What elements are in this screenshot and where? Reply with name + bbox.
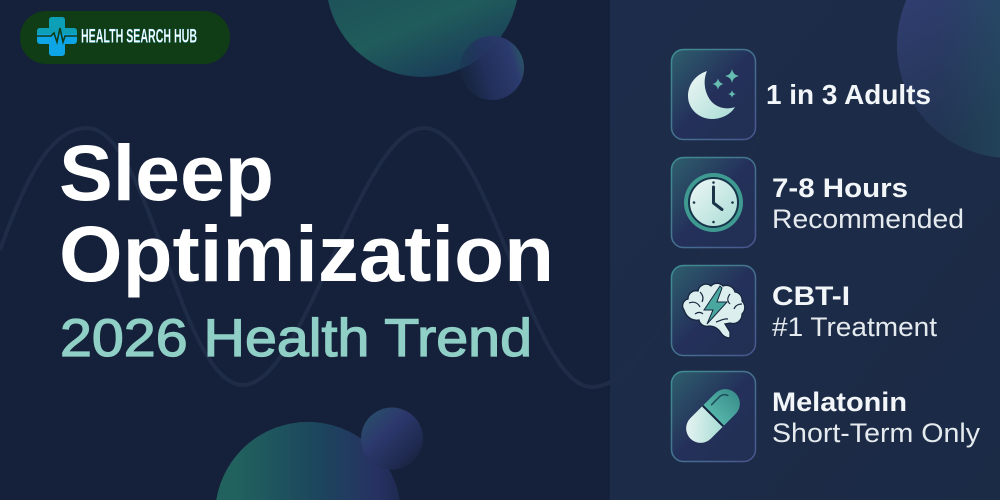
sine wave: [0, 128, 760, 387]
logo badge: [20, 11, 230, 64]
title: Optimization: [59, 209, 554, 298]
corner orb: [897, 0, 1000, 158]
icon tile: brain: [672, 266, 756, 356]
stat: adults: [672, 50, 931, 140]
label: 7-8 Hours: [772, 173, 908, 203]
right panel: [610, 0, 1000, 500]
stat: melatonin: [672, 372, 981, 462]
icon tile: moon: [672, 50, 756, 140]
small top orb: [460, 36, 524, 100]
stat: therapy: [672, 266, 938, 356]
title: [59, 128, 554, 298]
sublabel: Short-Term Only: [772, 418, 981, 448]
sublabel: #1 Treatment: [772, 312, 938, 342]
stat: hours: [672, 158, 964, 248]
label: 1 in 3 Adults: [766, 79, 931, 110]
title: Sleep: [59, 128, 274, 217]
sublabel: Recommended: [772, 204, 964, 234]
small bottom orb: [361, 408, 423, 470]
top orb: [328, 0, 517, 77]
label: CBT-I: [772, 281, 850, 311]
label: Melatonin: [772, 387, 907, 417]
icon: medical cross: [37, 17, 77, 56]
icon tile: clock: [672, 158, 756, 248]
logo text: HEALTH SEARCH HUB: [81, 26, 197, 48]
icon tile: capsule: [672, 372, 756, 462]
bottom orb: [216, 422, 400, 500]
subtitle: 2026 Health Trend: [60, 309, 532, 368]
